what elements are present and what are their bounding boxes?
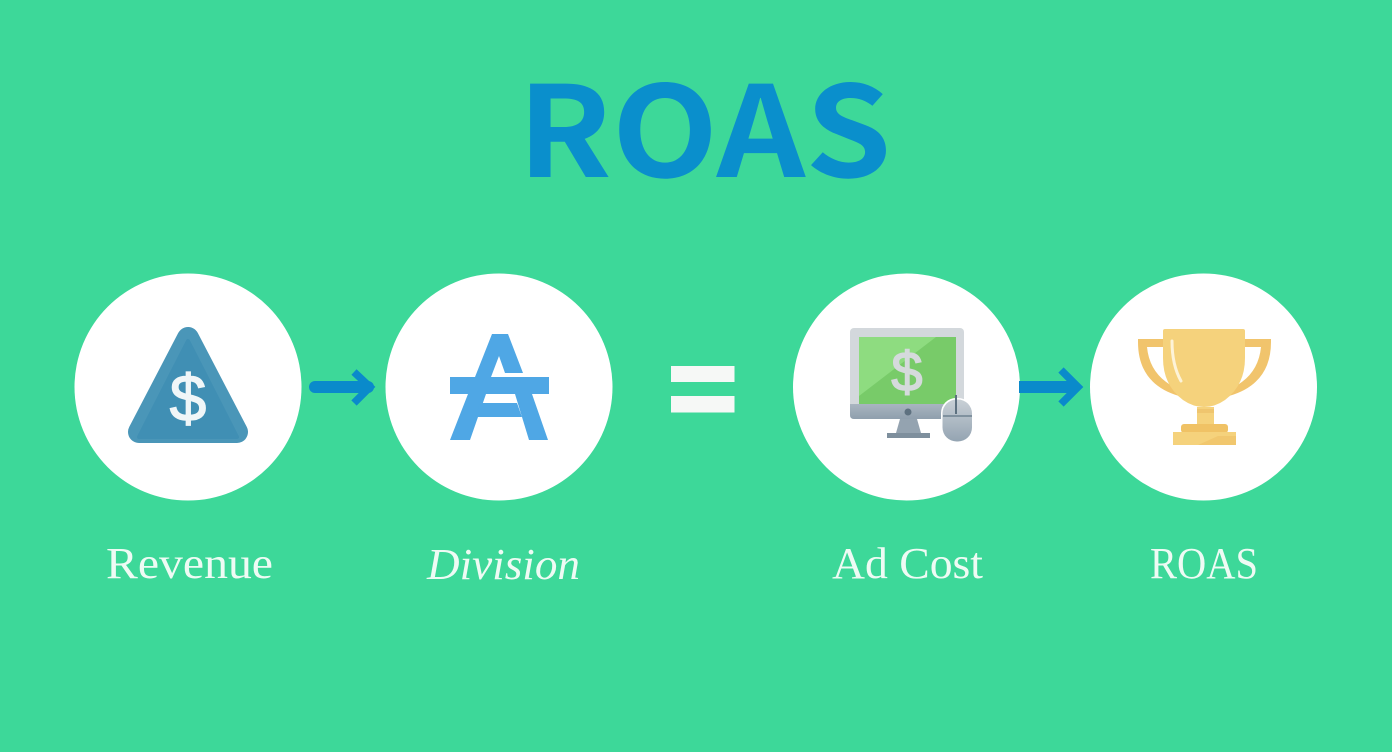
icon: dollar triangle: $ xyxy=(170,361,206,435)
arrow: ad cost to roas xyxy=(1019,370,1078,404)
title: ROAS xyxy=(518,32,892,214)
icon: monitor with dollar and mouse: $ xyxy=(891,340,923,403)
label: ad cost: Ad Cost xyxy=(832,539,983,588)
label: division: Division xyxy=(426,540,580,589)
icon: crossed letter A xyxy=(450,334,549,440)
label: roas: ROAS xyxy=(1150,539,1258,588)
step: roas xyxy=(1090,274,1317,588)
circle: division xyxy=(386,274,612,500)
step: revenue xyxy=(74,274,302,588)
step: division xyxy=(386,274,612,589)
circle: ad cost xyxy=(793,274,1020,500)
equals sign xyxy=(671,366,734,412)
circle: roas xyxy=(1090,274,1317,500)
circle: revenue xyxy=(74,274,302,500)
step: ad cost xyxy=(793,274,1020,588)
arrow: revenue to division xyxy=(315,372,370,403)
icon: dollar triangle xyxy=(139,338,237,437)
label: revenue: Revenue xyxy=(106,539,273,588)
icon: monitor with dollar and mouse xyxy=(850,328,973,443)
icon: gold trophy xyxy=(1138,329,1271,445)
